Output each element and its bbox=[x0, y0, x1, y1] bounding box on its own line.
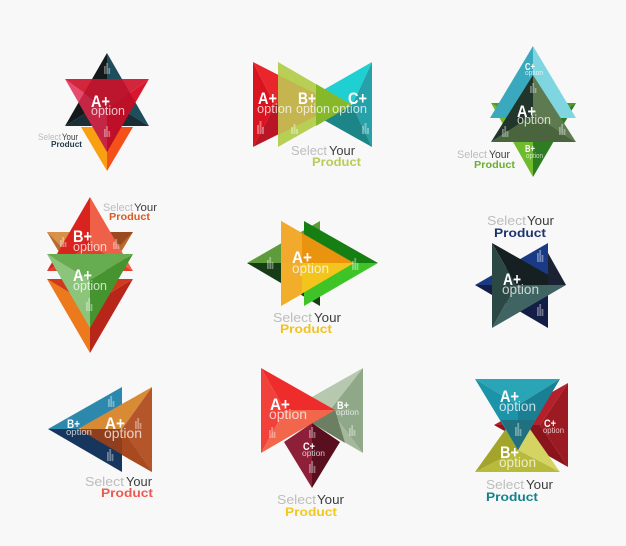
light teal triangle bbox=[490, 46, 576, 118]
label: A+ option: A+ bbox=[517, 102, 536, 121]
dark slate triangle bbox=[492, 243, 566, 328]
label: A+ option: A+ bbox=[270, 395, 290, 414]
label: A+ option bbox=[292, 248, 329, 276]
teal inverted triangle bbox=[475, 379, 560, 450]
label: B+ option: B+ bbox=[500, 443, 519, 462]
label: A+ option: option bbox=[257, 101, 292, 116]
label: C+ option bbox=[302, 441, 325, 458]
dark teal triangle bbox=[65, 53, 149, 126]
heading: Select Your Product: Select bbox=[85, 474, 124, 489]
red inverted triangle bbox=[65, 79, 149, 152]
label: A+ option: option bbox=[91, 103, 125, 118]
label: A+ option bbox=[73, 266, 107, 293]
label: C+ option: option bbox=[543, 426, 564, 435]
icon: left bars bbox=[60, 237, 66, 247]
label: C+ option: option bbox=[332, 101, 367, 116]
panel: middle-right dark star bbox=[475, 213, 566, 328]
label: A+ option: A+ bbox=[91, 92, 110, 111]
label: C+ option: C+ bbox=[303, 441, 315, 453]
sage triangle bbox=[289, 368, 363, 453]
icon: blue upper bars bbox=[108, 396, 114, 407]
label: B+ option: B+ bbox=[298, 89, 316, 108]
red triangle bbox=[253, 62, 337, 147]
heading: Select Your Product: Your bbox=[489, 149, 510, 161]
icon: right bars bbox=[352, 258, 358, 270]
heading: Select Your Product: Product bbox=[101, 486, 153, 500]
orange inverted bottom triangle bbox=[47, 279, 133, 353]
panel: top-left star badge bbox=[38, 53, 149, 171]
heading: Select Your Product: Product bbox=[486, 490, 538, 504]
label: A+ option: A+ bbox=[105, 414, 125, 433]
red left-pointing triangle bbox=[494, 383, 568, 467]
heading: Select Your Product: Product bbox=[312, 155, 361, 169]
label: B+ option: B+ bbox=[67, 417, 80, 431]
heading: Select Your Product: Your bbox=[526, 477, 554, 492]
dark olive triangle bbox=[491, 75, 576, 142]
icon: brown bars bbox=[135, 418, 141, 429]
icon: sage bars bbox=[349, 425, 355, 436]
label: B+ option: option bbox=[336, 407, 359, 417]
icon: top bars bbox=[530, 83, 536, 93]
icon: upper bars bbox=[537, 250, 543, 262]
brown triangle bbox=[78, 387, 152, 472]
bright green right triangle bbox=[304, 221, 378, 306]
icon: lower bars bbox=[537, 304, 543, 316]
orange triangle bbox=[81, 127, 133, 171]
red triangle bbox=[47, 197, 133, 271]
heading: Select Your Product: Your bbox=[62, 132, 78, 142]
label: A+ option bbox=[499, 387, 536, 414]
heading: Select Your Product: Product bbox=[280, 322, 332, 336]
icon: centre bars bbox=[515, 423, 521, 436]
label: C+ option bbox=[543, 418, 564, 435]
label: B+ option: B+ bbox=[73, 227, 92, 246]
label: C+ option: C+ bbox=[544, 418, 556, 430]
label: B+ option: option bbox=[499, 454, 536, 470]
heading: Select Your Product bbox=[457, 149, 516, 171]
panel: bottom-left arrow triangles bbox=[48, 387, 153, 500]
panel: middle-left stacked triangles bbox=[47, 197, 157, 353]
icon: top bars bbox=[104, 63, 110, 74]
heading: Select Your Product: Select bbox=[487, 213, 526, 228]
label: B+ option: B+ bbox=[525, 144, 535, 155]
green inverted triangle bbox=[491, 103, 576, 177]
label: C+ option: C+ bbox=[348, 89, 367, 108]
icon: right bars bbox=[559, 124, 565, 135]
label: B+ option bbox=[296, 89, 330, 116]
heading: Select Your Product bbox=[103, 202, 157, 223]
panel: bottom-right three triangles bbox=[475, 379, 568, 504]
icon: middle bars bbox=[309, 427, 315, 438]
label: B+ option: option bbox=[66, 427, 92, 437]
heading: Select Your Product bbox=[486, 477, 554, 504]
label: B+ option bbox=[336, 400, 359, 417]
label: C+ option: option bbox=[525, 70, 543, 77]
maroon triangle bbox=[284, 423, 340, 488]
label: A+ option bbox=[269, 395, 307, 422]
olive triangle bbox=[475, 412, 560, 472]
label: A+ option: option bbox=[502, 281, 539, 297]
label: A+ option: A+ bbox=[73, 266, 92, 285]
heading: Select Your Product: Select bbox=[457, 149, 487, 161]
icon: lower bars bbox=[104, 126, 110, 137]
green inverted triangle bbox=[47, 254, 133, 328]
icon: left bars bbox=[267, 257, 273, 269]
label: A+ option: A+ bbox=[292, 248, 312, 267]
heading: Select Your Product: Your bbox=[314, 310, 342, 325]
heading: Select Your Product bbox=[277, 492, 345, 519]
icon: green bars bbox=[86, 298, 92, 311]
icon: lime bars bbox=[291, 124, 298, 134]
yellow-orange triangle bbox=[281, 221, 354, 306]
dark green left triangle bbox=[247, 221, 320, 306]
label: B+ option: B+ bbox=[337, 400, 349, 412]
heading: Select Your Product: Select bbox=[103, 202, 133, 214]
label: B+ option: option bbox=[526, 153, 543, 160]
heading: Select Your Product: Select bbox=[38, 132, 61, 142]
icon: left bars bbox=[502, 126, 508, 137]
heading: Select Your Product: Select bbox=[291, 143, 327, 158]
label: A+ option: A+ bbox=[503, 270, 521, 289]
label: B+ option bbox=[525, 144, 543, 160]
label: A+ option bbox=[104, 414, 142, 441]
label: B+ option: option bbox=[296, 101, 330, 116]
heading: Select Your Product: Your bbox=[527, 213, 555, 228]
heading: Select Your Product bbox=[38, 132, 82, 149]
panel: centre arrow triangles bbox=[247, 221, 378, 336]
label: C+ option: C+ bbox=[525, 62, 535, 73]
panel: bottom-centre three triangles bbox=[261, 368, 363, 519]
label: C+ option bbox=[525, 62, 543, 77]
icon: right bars bbox=[113, 239, 119, 249]
label: A+ option: option bbox=[499, 398, 536, 414]
heading: Select Your Product: Your bbox=[329, 143, 356, 158]
lime triangle bbox=[278, 62, 352, 147]
panel: top-centre three triangles bbox=[253, 62, 372, 169]
heading: Select Your Product: Product bbox=[285, 505, 337, 519]
label: B+ option: option bbox=[73, 239, 107, 254]
label: A+ option bbox=[91, 92, 125, 118]
icon: maroon bars bbox=[309, 461, 315, 473]
label: A+ option bbox=[257, 89, 292, 116]
icon: teal bars bbox=[362, 123, 369, 134]
icon: blue lower bars bbox=[107, 449, 113, 461]
brown inverted triangle bbox=[47, 232, 133, 262]
heading: Select Your Product: Select bbox=[273, 310, 312, 325]
heading: Select Your Product: Select bbox=[277, 492, 316, 507]
label: C+ option bbox=[332, 89, 367, 116]
heading: Select Your Product bbox=[487, 213, 555, 240]
heading: Select Your Product bbox=[273, 310, 342, 336]
heading: Select Your Product: Your bbox=[126, 474, 153, 489]
label: A+ option bbox=[517, 102, 551, 127]
label: A+ option: option bbox=[269, 406, 307, 422]
label: A+ option: A+ bbox=[500, 387, 519, 406]
heading: Select Your Product: Your bbox=[317, 492, 345, 507]
panel: top-right stacked triangles bbox=[457, 46, 576, 177]
heading: Select Your Product: Product bbox=[51, 140, 82, 149]
blue triangle bbox=[48, 387, 122, 472]
navy triangle bbox=[475, 243, 548, 328]
heading: Select Your Product bbox=[85, 474, 153, 500]
label: B+ option bbox=[66, 417, 92, 437]
label: A+ option: A+ bbox=[258, 89, 277, 108]
heading: Select Your Product: Your bbox=[134, 202, 157, 214]
label: A+ option: option bbox=[73, 278, 107, 293]
heading: Select Your Product: Select bbox=[486, 477, 524, 492]
label: A+ option bbox=[502, 270, 539, 297]
icon: red bars bbox=[269, 427, 275, 438]
heading: Select Your Product bbox=[291, 143, 361, 169]
teal triangle bbox=[297, 62, 372, 147]
label: C+ option: option bbox=[302, 448, 325, 458]
heading: Select Your Product: Product bbox=[494, 226, 546, 240]
heading: Select Your Product: Product bbox=[109, 212, 151, 223]
label: B+ option bbox=[499, 443, 536, 470]
label: A+ option: option bbox=[517, 112, 551, 127]
label: A+ option: option bbox=[104, 425, 142, 441]
label: B+ option bbox=[73, 227, 107, 254]
icon: red bars bbox=[257, 121, 264, 134]
red triangle bbox=[261, 368, 335, 453]
heading: Select Your Product: Product bbox=[474, 160, 516, 171]
label: A+ option: option bbox=[292, 260, 329, 276]
